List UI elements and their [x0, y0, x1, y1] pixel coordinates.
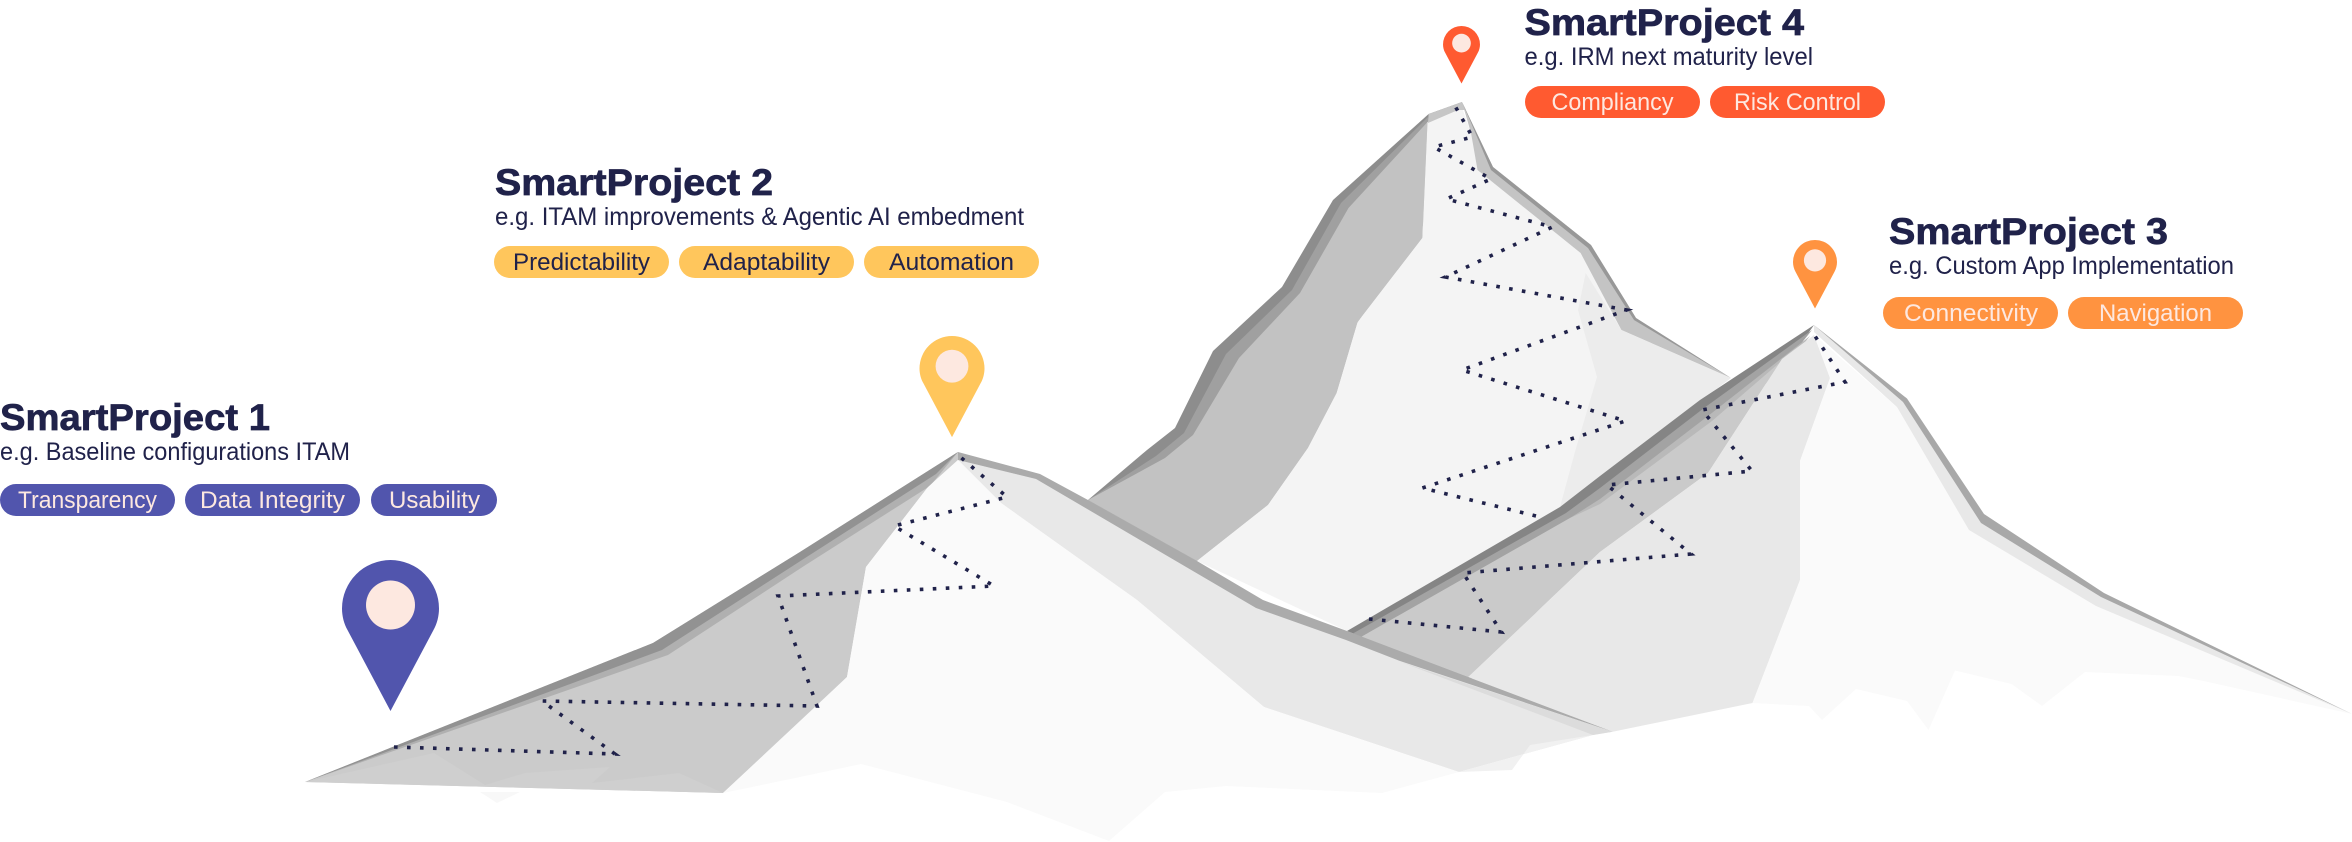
mountain: peak 2 (front left) — [305, 452, 1613, 841]
pin: project 4 — [1443, 26, 1480, 84]
base tip — [480, 792, 520, 803]
tag: Connectivity: Connectivity — [1904, 300, 2039, 327]
tag: Navigation — [2068, 297, 2243, 329]
peak 4 shadow face — [1088, 122, 1428, 561]
heading: SmartProject 4 — [1524, 2, 1804, 43]
description: e.g. Baseline configurations ITAM — [0, 438, 350, 466]
panel: SmartProject 2 — [494, 162, 1039, 278]
peak 3 ridge bands left — [1347, 325, 1814, 680]
peak 2 left ridge bands — [305, 452, 958, 782]
tag: Transparency: Transparency — [18, 487, 158, 514]
panel: SmartProject 1 — [0, 397, 497, 516]
peak 4 silhouette — [1088, 102, 1462, 561]
peak 2 base facets — [305, 753, 723, 793]
tag: Connectivity — [1883, 297, 2058, 329]
peak 3 lit face — [1752, 335, 2352, 730]
peak 4 summit cap — [1428, 102, 1466, 123]
tag: Adaptability — [679, 246, 854, 278]
peak 3 middle face — [1468, 335, 1830, 732]
tag: Predictability — [494, 246, 669, 278]
tag: Usability — [371, 484, 497, 516]
tag: Predictability: Predictability — [513, 249, 651, 276]
panel: SmartProject 4 — [1524, 2, 1885, 118]
pin: project 2 — [920, 336, 984, 437]
peak 4 right ridge band — [1462, 102, 1731, 378]
peak 4 lit face — [1197, 108, 1731, 631]
description: e.g. IRM next maturity level — [1524, 43, 1813, 71]
heading: SmartProject 3 — [1889, 211, 2168, 252]
tag: Compliancy: Compliancy — [1552, 89, 1674, 116]
route: project 1 and 2 trail — [394, 455, 1007, 754]
peak 2 right face — [958, 460, 1613, 772]
pin: project 3 — [1793, 240, 1837, 308]
tag: Adaptability: Adaptability — [703, 249, 831, 276]
peak 2 right ridge band — [958, 452, 1613, 732]
tag: Risk Control — [1710, 86, 1885, 118]
tag: Risk Control: Risk Control — [1734, 89, 1861, 116]
tag: Automation — [864, 246, 1039, 278]
base patch — [1459, 735, 1593, 772]
route: project 3 trail — [1369, 333, 1845, 632]
tag: Automation: Automation — [889, 249, 1014, 276]
peak 3 shadow face — [1361, 345, 1800, 677]
tag: Compliancy — [1525, 86, 1700, 118]
peak 3 right ridge light band — [1814, 325, 2352, 714]
tag: Usability: Usability — [389, 487, 481, 514]
heading: SmartProject 1 — [0, 397, 270, 438]
mountain: peak 4 (back) — [1088, 102, 1731, 631]
tag: Navigation: Navigation — [2099, 300, 2212, 327]
peak 3 right ridge dark band — [1814, 325, 2352, 714]
tag: Data Integrity: Data Integrity — [200, 487, 346, 514]
pin: project 1 — [342, 560, 439, 711]
peak 4 right shaded facet — [1560, 273, 1731, 507]
description: e.g. ITAM improvements & Agentic AI embedment — [495, 203, 1024, 231]
peak 2 shadow face — [305, 452, 958, 793]
panel: SmartProject 3 — [1883, 211, 2243, 329]
heading: SmartProject 2 — [495, 162, 773, 203]
description: e.g. Custom App Implementation — [1889, 252, 2234, 280]
mountain: peak 3 (middle right) — [1347, 325, 2352, 732]
route: project 4 trail — [1422, 107, 1626, 516]
peak 2 lit face — [723, 460, 1459, 841]
